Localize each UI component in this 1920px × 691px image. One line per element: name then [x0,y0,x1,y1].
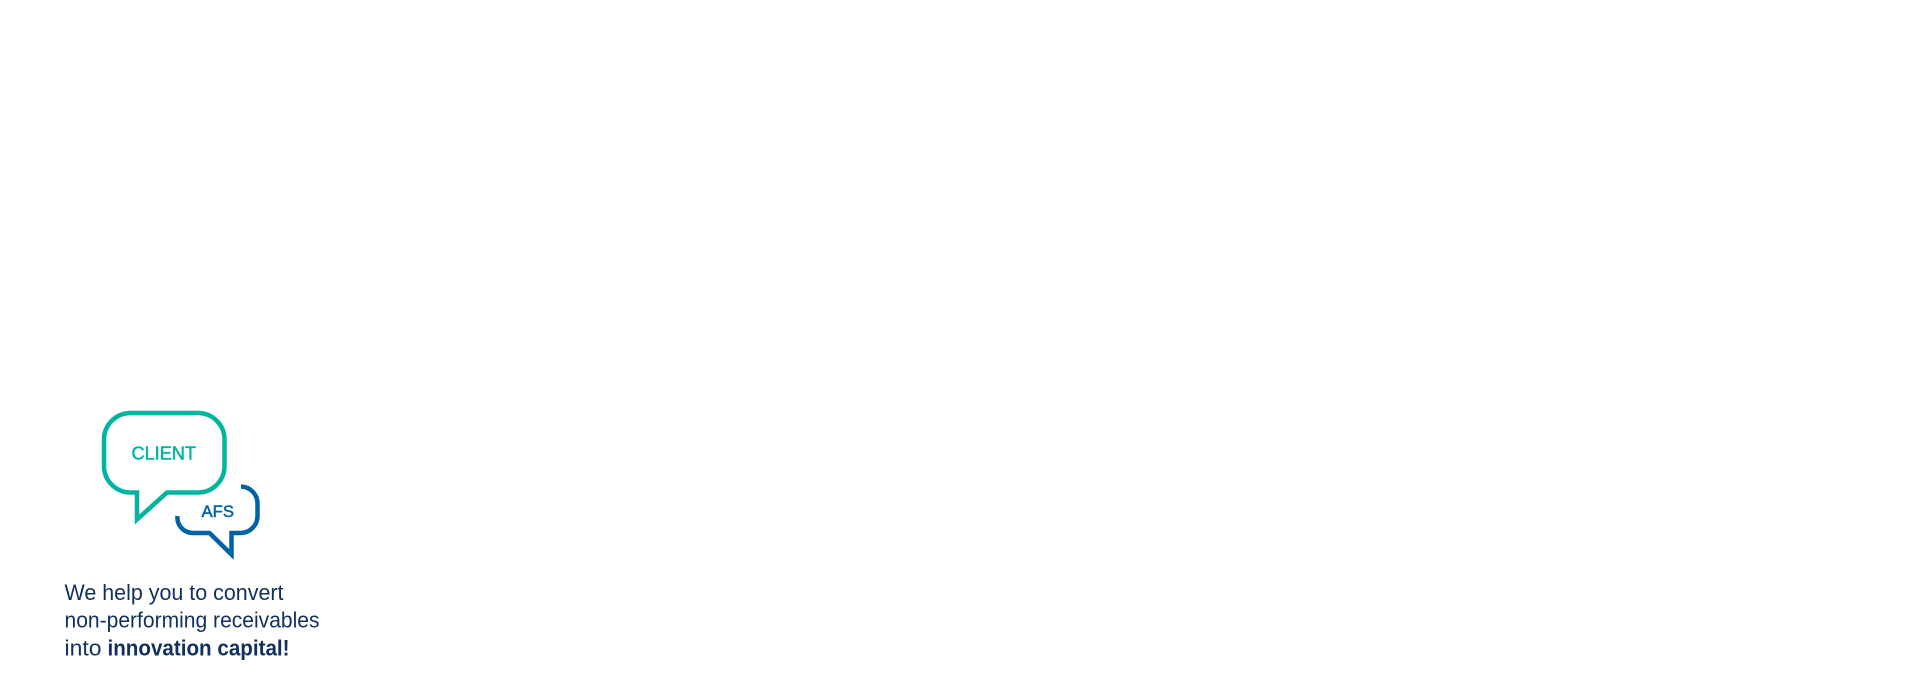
AFS label: AFS [202,502,234,521]
text block: value statement [64,580,320,660]
text block: value statement: innovation capital! [108,636,290,660]
text block: value statement: into [64,636,102,660]
text block: value statement: non-performing receivables [64,608,320,632]
client label: CLIENT [132,444,196,464]
text block: value statement: We help you to convert [64,580,284,605]
icon: AFS speech bubble [177,486,258,554]
icon: client speech bubble [104,413,224,520]
